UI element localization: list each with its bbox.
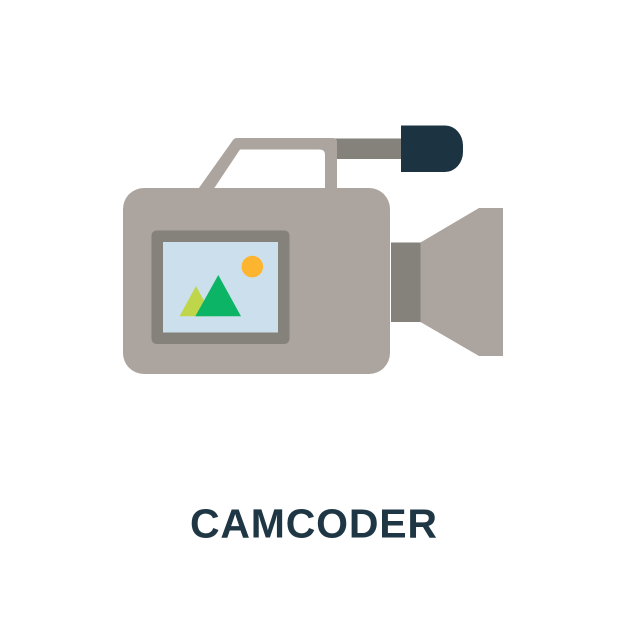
viewfinder screen	[152, 230, 290, 344]
screen frame	[152, 230, 290, 344]
lens hood	[420, 208, 503, 356]
lens neck	[391, 242, 421, 322]
icon: sun	[242, 256, 263, 277]
microphone boom	[334, 138, 402, 159]
screen display	[163, 242, 278, 332]
title: CAMCODER	[190, 500, 437, 546]
carry handle	[198, 138, 337, 190]
icon: camcorder	[123, 126, 503, 374]
microphone head	[401, 126, 463, 172]
icon: small mountain	[180, 286, 212, 316]
camera body	[123, 188, 390, 374]
icon: large mountain	[195, 275, 241, 316]
